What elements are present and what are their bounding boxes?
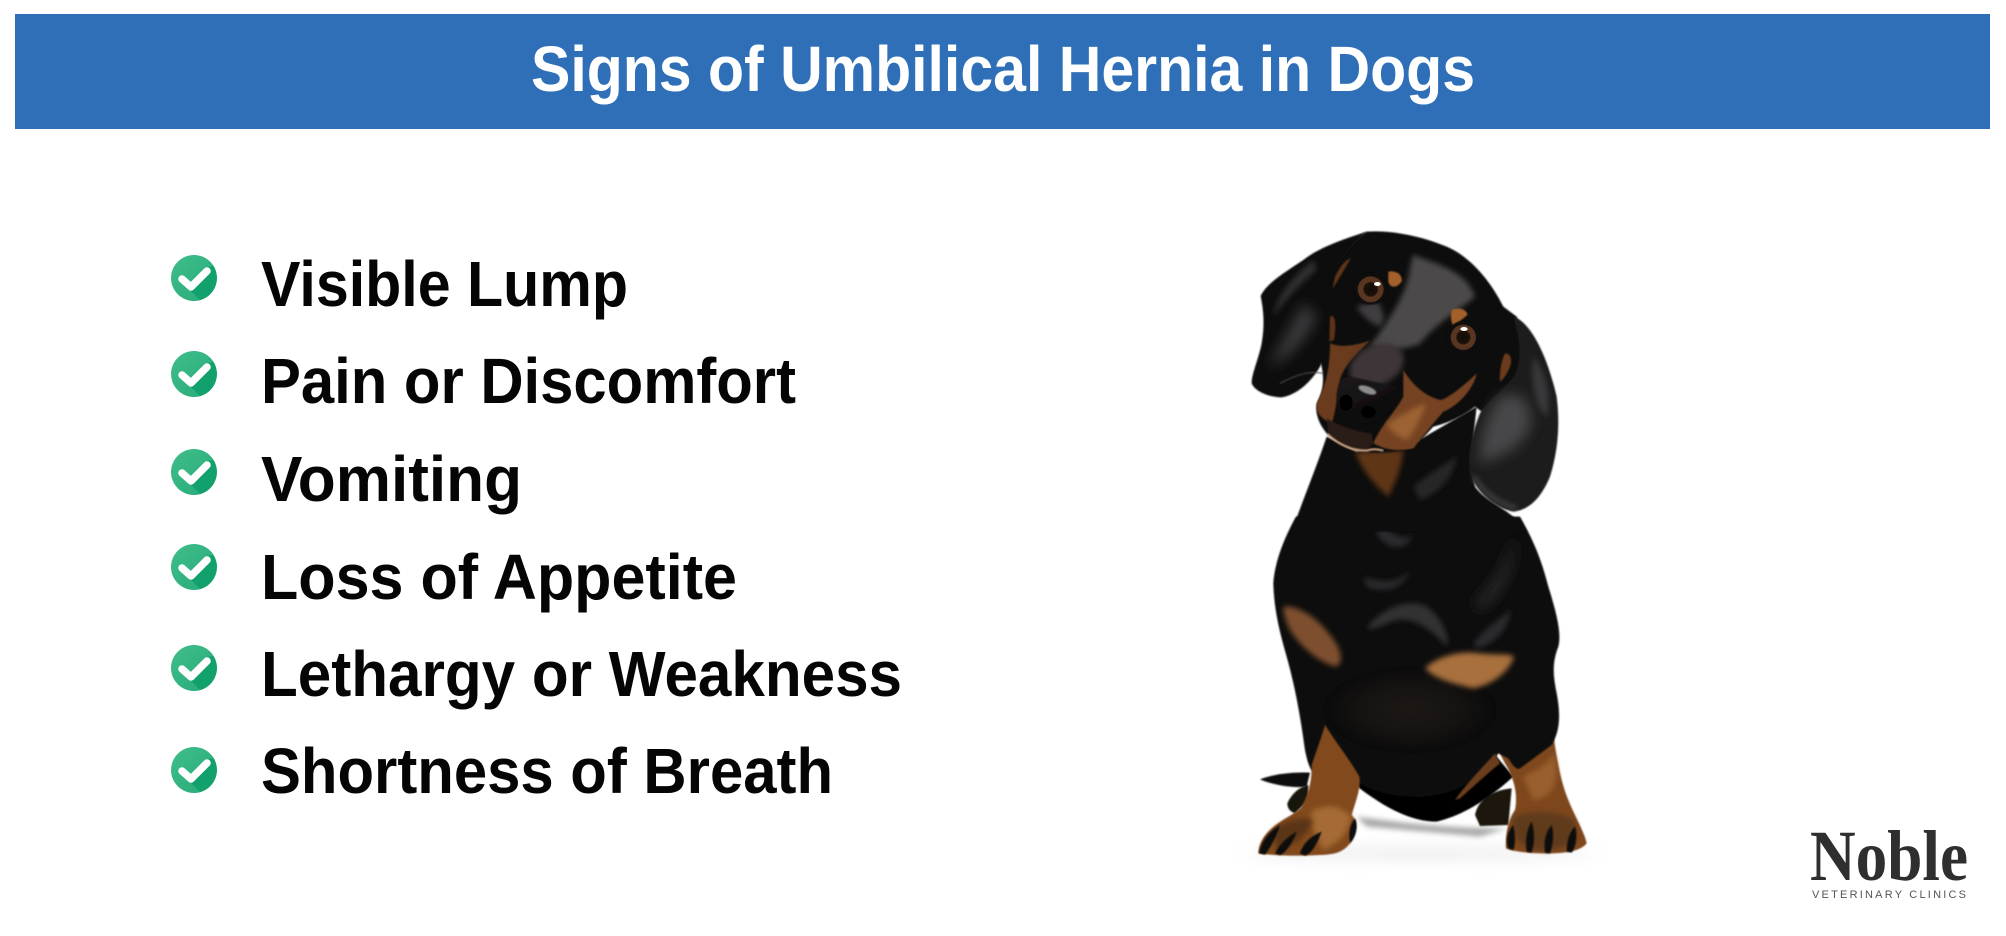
nose bridge <box>1343 335 1411 395</box>
dog head and ears <box>1252 231 1558 532</box>
dog torso <box>1273 517 1559 797</box>
right ear <box>1469 317 1558 512</box>
forehead sheen <box>1370 255 1475 349</box>
fur highlights <box>1367 603 1447 647</box>
logo: Noble Veterinary Clinics: Noble <box>1810 816 1968 896</box>
mouth and chin <box>1327 418 1373 450</box>
illustration: dachshund dog <box>1247 231 1593 858</box>
dog lower body <box>1247 517 1593 858</box>
front leg right <box>1497 720 1587 853</box>
eye right <box>1447 321 1480 352</box>
item: Visible Lump: Visible Lump <box>261 248 628 320</box>
logo: Noble Veterinary Clinics: VETERINARY CLINICS <box>1812 889 1966 901</box>
title: Signs of Umbilical Hernia in Dogs <box>531 33 1475 105</box>
checklist: signs <box>171 248 902 807</box>
item: Shortness of Breath: Shortness of Breath <box>261 735 833 807</box>
brown eyebrows and tan <box>1388 271 1402 287</box>
chest tan patches <box>1283 607 1341 667</box>
head <box>1312 231 1527 452</box>
item: Loss of Appetite: Loss of Appetite <box>261 541 737 613</box>
item: Vomiting: Vomiting <box>261 443 522 515</box>
muzzle tan <box>1316 341 1370 423</box>
left ear <box>1252 232 1367 397</box>
nose <box>1337 377 1397 423</box>
front leg left <box>1258 725 1360 856</box>
eye left <box>1354 273 1387 305</box>
title banner <box>15 14 1990 129</box>
item: Lethargy or Weakness: Lethargy or Weakness <box>261 638 902 710</box>
neck <box>1292 407 1527 532</box>
back leg tan sliver <box>1455 753 1500 800</box>
belly sheen <box>1323 667 1497 753</box>
item: Pain or Discomfort: Pain or Discomfort <box>261 345 796 417</box>
